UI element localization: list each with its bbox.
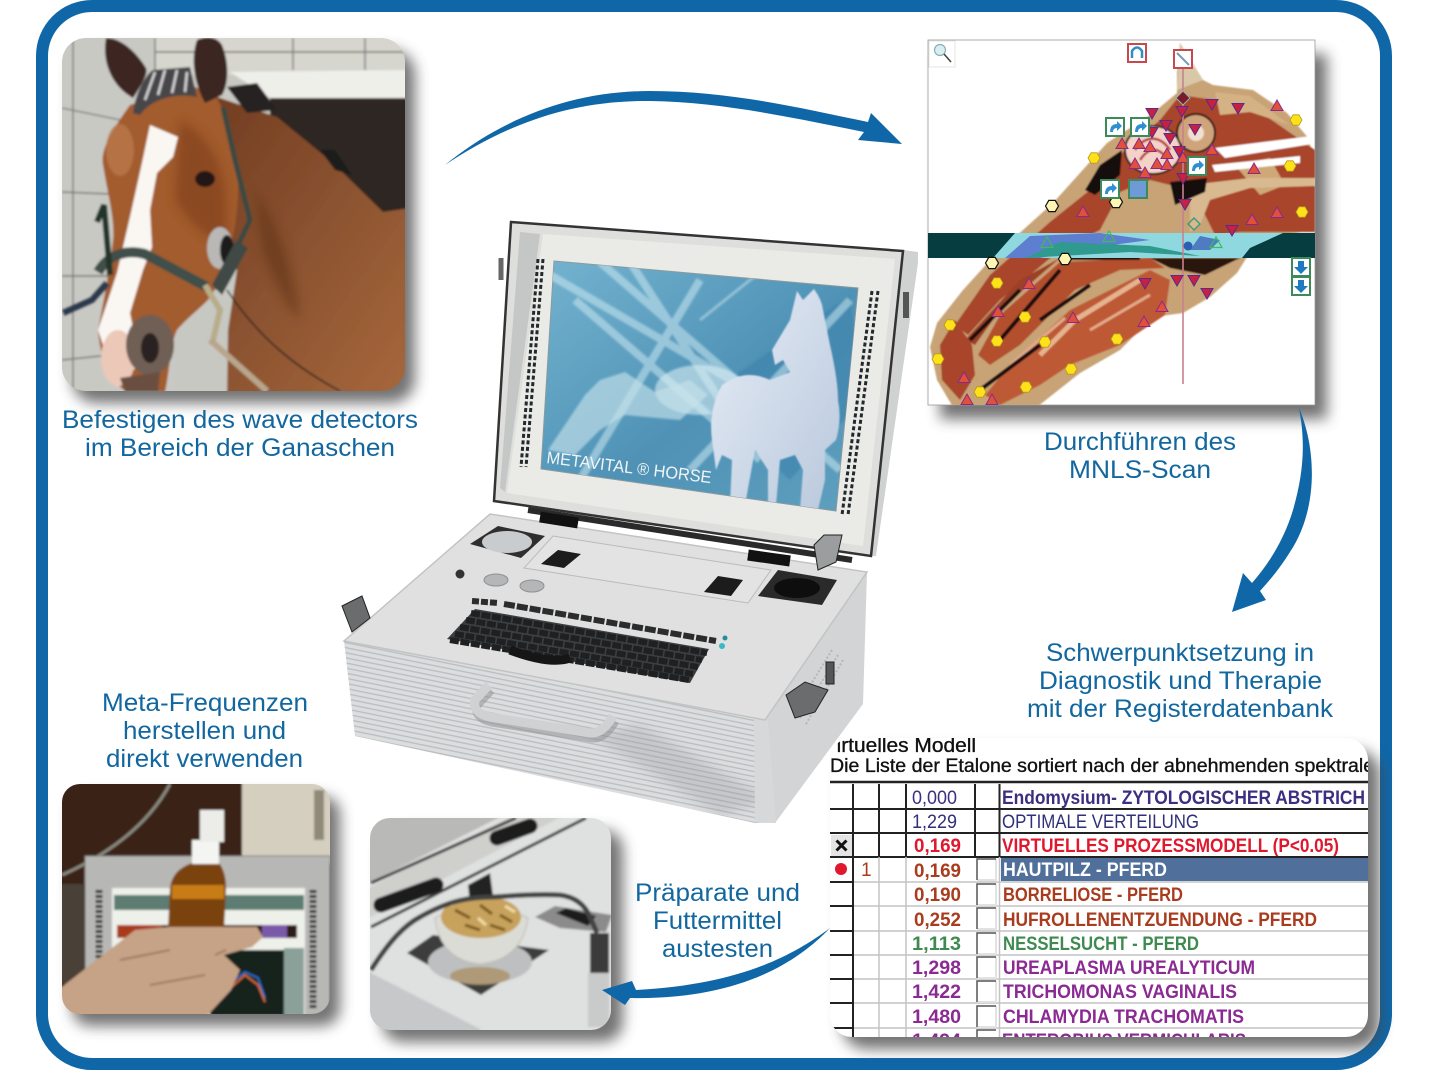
caption: feed test: austesten [662, 935, 773, 963]
caption: registry [1027, 639, 1334, 723]
table rows: BORRELIOSE - PFERD [1003, 885, 1183, 906]
caption: MNLS scan: Durchführen des [1044, 428, 1236, 456]
carrying handle [475, 685, 615, 738]
caption: meta-frequencies [102, 689, 308, 773]
case body [342, 510, 867, 823]
caption: meta-frequencies: direkt verwenden [106, 745, 303, 773]
table rows: Endomysium- ZYTOLOGISCHER ABSTRICH [1002, 788, 1365, 809]
panel: horse photo with wave detector [50, 30, 420, 405]
table rows: 0,190 [914, 885, 961, 906]
caption: feed test [635, 879, 800, 963]
caption: MNLS scan [1044, 428, 1236, 484]
table rows: 1,113 [912, 934, 961, 955]
table rows: 1,422 [912, 982, 961, 1003]
table header text [831, 738, 1368, 776]
keyboard [447, 601, 728, 683]
table rows: 1 [861, 860, 872, 881]
device: Metavital Horse case [342, 222, 918, 823]
caption: feed test: Futtermittel [653, 907, 782, 935]
table rows: HAUTPILZ - PFERD [1003, 860, 1167, 881]
table rows: ENTEROBIUS VERMICULARIS [1002, 1031, 1246, 1052]
table rows: 0,169 [914, 836, 961, 857]
caption: feed test: Präparate und [635, 879, 800, 907]
caption: registry: Schwerpunktsetzung in [1046, 639, 1314, 667]
caption: meta-frequencies: Meta-Frequenzen [102, 689, 308, 717]
panel: spray bottle photo [55, 778, 340, 1026]
caption: registry: mit der Registerdatenbank [1027, 695, 1334, 723]
scan markers [932, 91, 1308, 404]
scan toolbar buttons [929, 41, 1310, 295]
table rows: TRICHOMONAS VAGINALIS [1003, 982, 1237, 1003]
caption: meta-frequencies: herstellen und [123, 717, 286, 745]
table rows: 0,169 [914, 861, 961, 882]
table rows: CHLAMYDIA TRACHOMATIS [1003, 1007, 1244, 1028]
caption: MNLS scan: MNLS-Scan [1069, 456, 1211, 484]
table rows: 1,480 [912, 1007, 961, 1028]
panel: MNLS scan anatomy [928, 40, 1327, 419]
table rows: 1,229 [912, 812, 957, 833]
table rows: NESSELSUCHT - PFERD [1003, 934, 1199, 955]
lid: METAVITAL ® HORSE [546, 448, 713, 487]
caption: wave detector: Befestigen des wave detectors [62, 406, 418, 434]
arrow: registry to feed test [602, 928, 830, 1005]
caption: wave detector [62, 406, 418, 462]
table rows: 0,000 [912, 788, 957, 809]
caption: registry: Diagnostik und Therapie [1039, 667, 1322, 695]
table rows: UREAPLASMA UREALYTICUM [1003, 958, 1255, 979]
panel: registry table [823, 735, 1385, 1052]
lid [494, 222, 918, 556]
table rows: OPTIMALE VERTEILUNG [1002, 812, 1199, 833]
caption: wave detector: im Bereich der Ganaschen [85, 434, 395, 462]
arrow: photo to scan [445, 91, 902, 165]
table rows: 0,252 [914, 910, 961, 931]
arrow: scan to registry [1232, 408, 1312, 612]
panel: feed test photo [365, 812, 623, 1042]
table rows: 1,494 [912, 1031, 961, 1052]
table rows [861, 788, 1365, 1052]
table grid [830, 782, 1368, 1037]
table header text: Die Liste der Etalone sortiert nach der abnehmenden spektralen [830, 755, 1385, 777]
table header text: Virtuelles Modell [823, 735, 976, 757]
table rows: 1,298 [912, 958, 961, 979]
table rows: HUFROLLENENTZUENDUNG - PFERD [1003, 910, 1317, 931]
table rows: VIRTUELLES PROZESSMODELL (P<0.05) [1002, 836, 1339, 857]
